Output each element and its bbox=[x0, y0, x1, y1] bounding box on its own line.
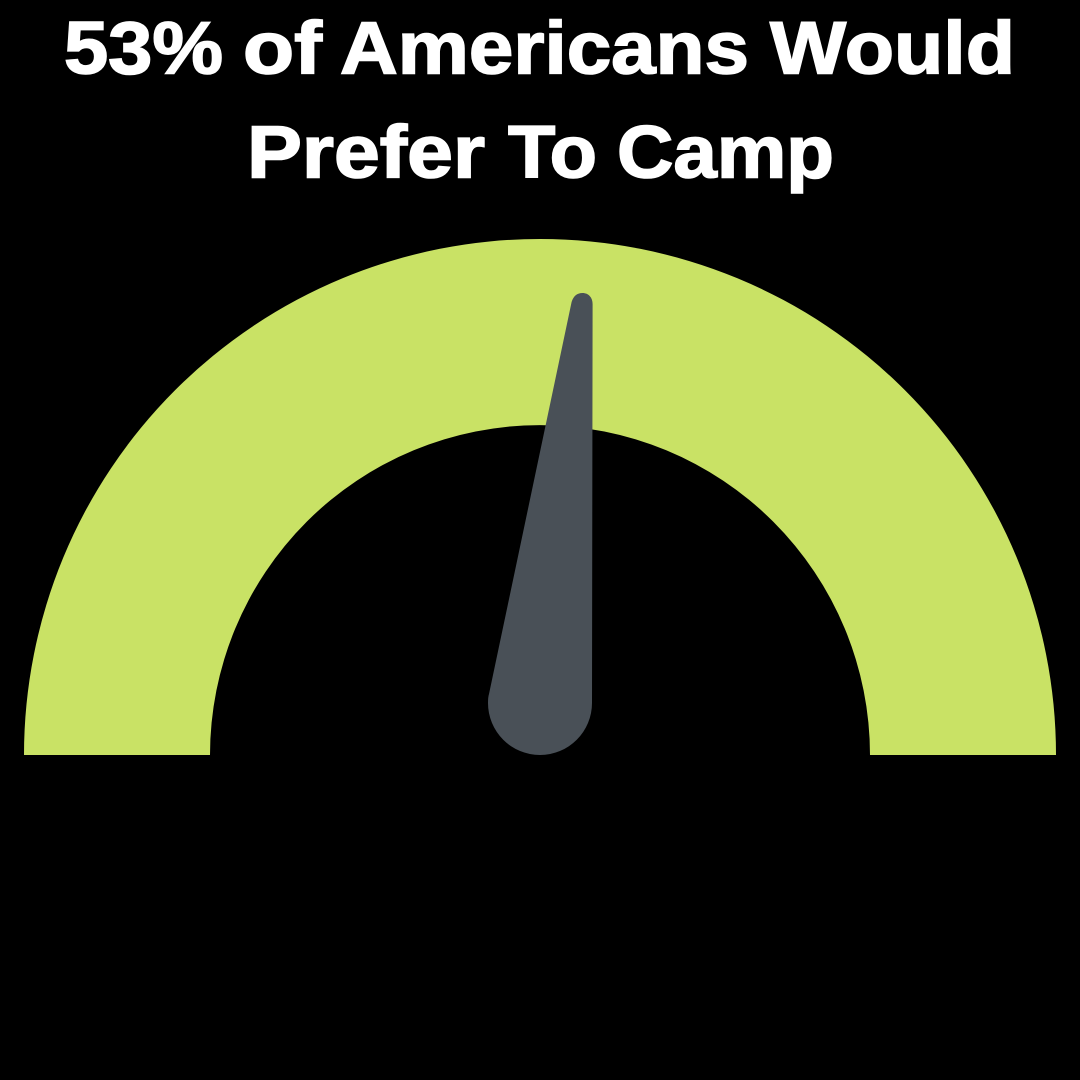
title bbox=[64, 6, 1015, 194]
title: Prefer bbox=[247, 110, 485, 194]
title: Camp bbox=[617, 110, 834, 194]
title: Americans bbox=[340, 6, 749, 90]
title: To bbox=[508, 110, 597, 194]
gauge needle bbox=[488, 293, 593, 755]
title: of bbox=[243, 6, 322, 90]
title: Would bbox=[770, 6, 1015, 90]
gauge arc bbox=[24, 239, 1056, 755]
title: 53% bbox=[64, 6, 223, 90]
